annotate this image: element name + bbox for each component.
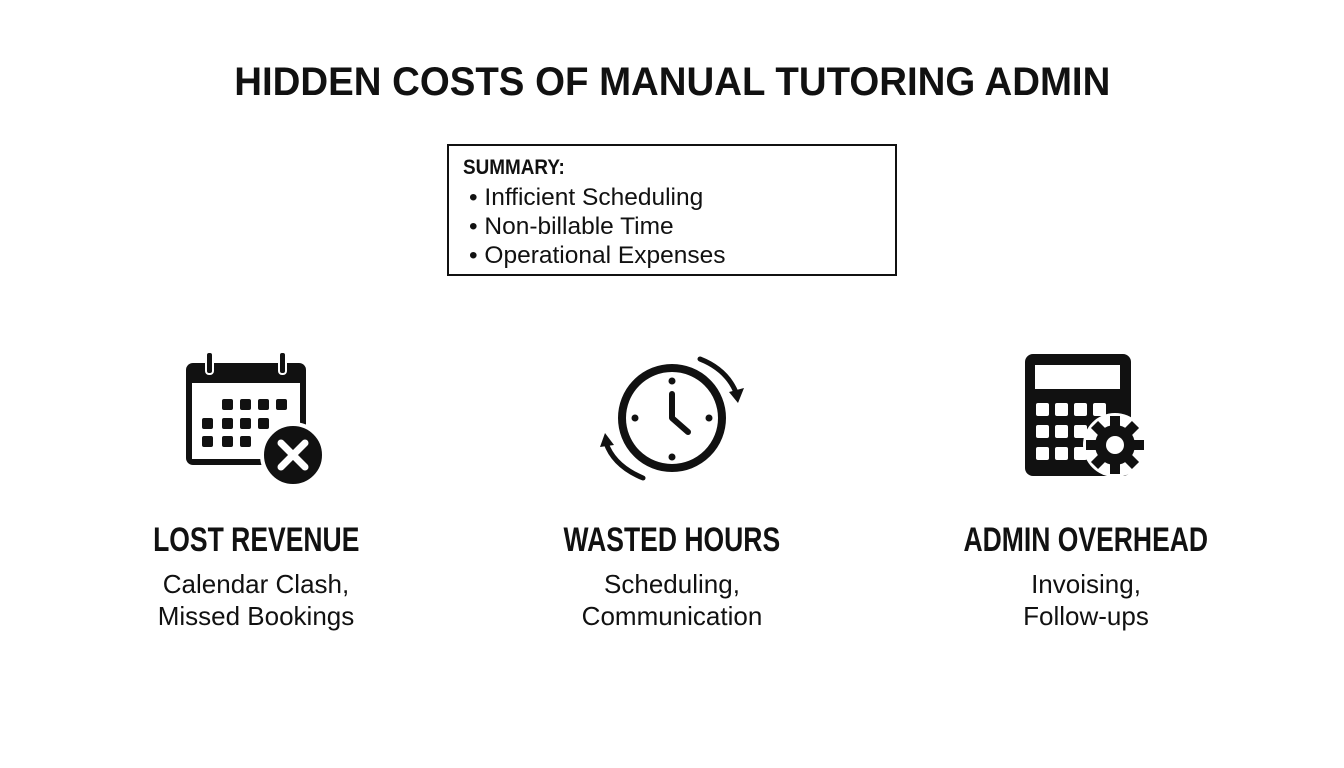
text: lost revenue: Missed Bookings — [158, 601, 354, 631]
summary heading: SUMMARY: — [463, 156, 565, 179]
bullet 1: • Infficient Scheduling — [469, 184, 703, 211]
column: admin overhead — [964, 521, 1208, 631]
text: wasted hours: Scheduling, — [604, 569, 740, 599]
text: wasted hours — [582, 569, 762, 631]
text: admin overhead: Follow-ups — [1023, 601, 1149, 631]
text: admin overhead — [1023, 569, 1149, 631]
heading: lost revenue: LOST REVENUE — [153, 521, 359, 559]
bullet 3: • Operational Expenses — [469, 242, 725, 269]
bullet 2: • Non-billable Time — [469, 213, 674, 240]
icon: calendar with x — [186, 353, 322, 484]
text: admin overhead: Invoising, — [1031, 569, 1141, 599]
heading: wasted hours: WASTED HOURS — [564, 521, 780, 559]
column: wasted hours — [564, 521, 780, 631]
text: wasted hours: Communication — [582, 601, 762, 631]
title: HIDDEN COSTS OF MANUAL TUTORING ADMIN — [234, 60, 1110, 104]
text: lost revenue — [158, 569, 354, 631]
icon: calculator with gear — [1025, 354, 1144, 476]
icon: clock with arrows — [600, 356, 744, 480]
text: lost revenue: Calendar Clash, — [163, 569, 349, 599]
column: lost revenue — [153, 521, 359, 631]
summary box — [447, 144, 897, 276]
heading: admin overhead: ADMIN OVERHEAD — [964, 521, 1208, 559]
